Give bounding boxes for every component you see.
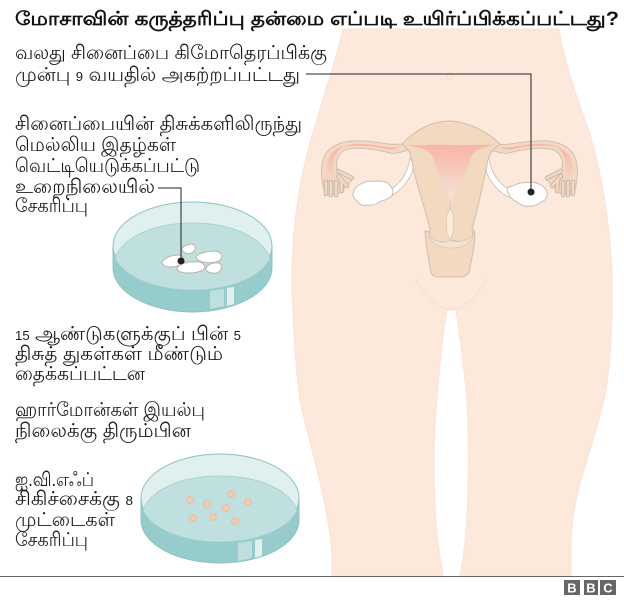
caption: transplanted: தைக்கப்பட்டன — [15, 363, 146, 386]
caption: hormones: ஹார்மோன்கள் இயல்பு — [15, 399, 205, 422]
caption: IVF eggs: சேகரிப்பு — [15, 529, 88, 551]
right fallopian tube — [491, 141, 577, 195]
caption: tissue frozen: மெல்லிய இதழ்கள் — [15, 134, 176, 157]
title: மோசாவின் கருத்தரிப்பு தன்மை எப்படி உயிர்ப்பிக்கப்பட்டது? — [15, 9, 619, 32]
caption: IVF eggs: முட்டைகள் — [15, 509, 115, 532]
dish base — [141, 498, 299, 563]
dish base — [113, 246, 272, 312]
petri dish with tissue — [113, 188, 272, 312]
reproductive system illustration — [322, 121, 577, 277]
dish rim — [113, 202, 272, 290]
dish highlights — [238, 541, 252, 561]
caption: IVF eggs — [15, 469, 133, 551]
BBC logo — [564, 580, 616, 596]
first caption: வலது சினைப்பை கிமோதெரப்பிக்கு — [15, 42, 327, 65]
caption: hormones: நிலைக்கு திரும்பின — [15, 420, 192, 444]
footer rule — [0, 576, 624, 577]
left ovary — [353, 181, 393, 206]
uterus — [402, 121, 500, 242]
eggs — [186, 490, 252, 524]
leader dot — [528, 188, 534, 196]
caption: tissue frozen: வெட்டியெடுக்கப்பட்டு — [15, 155, 200, 178]
leader dot — [178, 258, 184, 264]
dish highlights — [210, 289, 224, 309]
vaginal fornix — [429, 236, 473, 248]
caption: IVF eggs: சிகிச்சைக்கு 8 — [15, 488, 133, 511]
vagina — [425, 230, 475, 277]
dish liquid — [115, 223, 270, 290]
leader line to tissue — [158, 188, 181, 261]
tissue pieces — [162, 244, 222, 273]
dish rim — [141, 454, 299, 542]
caption: IVF eggs: ஐ.வி.எஃப் — [15, 469, 94, 491]
cervical canal — [446, 201, 454, 240]
left ovarian ligament — [380, 158, 414, 197]
endometrium — [406, 145, 494, 201]
first caption — [15, 42, 327, 87]
right ovary — [507, 182, 547, 206]
caption: tissue frozen: சேகரிப்பு — [15, 195, 88, 217]
caption: tissue frozen: உறைநிலையில் — [15, 176, 155, 200]
petri dish with eggs — [141, 454, 299, 563]
groin line — [416, 280, 486, 309]
first caption: முன்பு 9 வயதில் அகற்றப்பட்டது — [15, 64, 300, 87]
caption: tissue frozen: சினைப்பையின் திசுக்களிலிருந்து — [15, 113, 302, 136]
caption: transplanted: திசுத் துகள்கள் மீண்டும் — [15, 343, 223, 366]
leader line to ovary — [306, 74, 531, 192]
navel — [447, 73, 453, 79]
caption: hormones — [15, 399, 205, 444]
dish liquid — [143, 476, 297, 542]
right ovarian ligament — [485, 158, 518, 197]
caption: tissue frozen — [15, 113, 302, 217]
BBC logo: C — [603, 580, 613, 596]
BBC logo: B — [586, 580, 596, 596]
callout: ovary removed — [15, 42, 534, 196]
body silhouette — [292, 29, 612, 576]
caption: transplanted: 15 ஆண்டுகளுக்குப் பின் 5 — [15, 323, 241, 346]
caption: transplanted — [15, 323, 241, 386]
left fallopian tube — [322, 141, 408, 195]
BBC logo: B — [567, 580, 577, 596]
